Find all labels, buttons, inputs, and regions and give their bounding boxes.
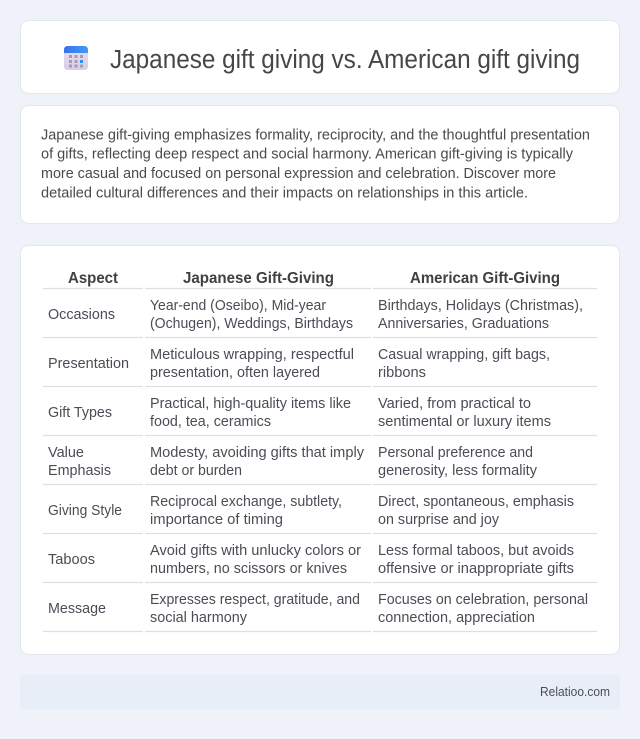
row: taboos: Avoid gifts with unlucky colors or <box>150 542 361 559</box>
row: value emphasis: Value <box>48 444 84 461</box>
row: occasions: Year-end (Oseibo), Mid-year <box>150 297 326 314</box>
row: gift types: Practical, high-quality items like <box>150 395 351 412</box>
row: taboos <box>48 542 574 577</box>
row: value emphasis <box>48 444 537 479</box>
row: taboos: Less formal taboos, but avoids <box>378 542 574 559</box>
row: value emphasis: Personal preference and <box>378 444 533 461</box>
table header row: Japanese Gift-Giving <box>183 270 334 287</box>
row: message: Focuses on celebration, personal <box>378 591 588 608</box>
table header row: Aspect <box>68 270 118 287</box>
row: giving style: Reciprocal exchange, subtlety, <box>150 493 342 510</box>
row: presentation: Casual wrapping, gift bags, <box>378 346 550 363</box>
row: presentation: Presentation <box>48 355 129 372</box>
row: value emphasis: debt or burden <box>150 462 242 479</box>
row: giving style: Giving Style <box>48 502 122 519</box>
row: giving style <box>48 493 574 528</box>
intro text: of gifts, reflecting deep respect and social harmony. American gift-giving is typically <box>41 146 573 163</box>
row: message: social harmony <box>150 609 247 626</box>
panel: introduction <box>20 106 620 224</box>
row: gift types: food, tea, ceramics <box>150 413 271 430</box>
intro text: detailed cultural differences and their impacts on relationships in this article. <box>41 184 528 201</box>
row: gift types: sentimental or luxury items <box>378 413 551 430</box>
intro text: more casual and focused on personal expression and celebration. Discover more <box>41 165 556 182</box>
row: value emphasis: generosity, less formality <box>378 462 537 479</box>
row: taboos: offensive or inappropriate gifts <box>378 560 574 577</box>
row: message: Expresses respect, gratitude, and <box>150 591 360 608</box>
row: message: Message <box>48 600 106 617</box>
row: giving style: Direct, spontaneous, emphasis <box>378 493 574 510</box>
row: occasions: (Ochugen), Weddings, Birthdays <box>150 315 353 332</box>
row: occasions: Occasions <box>48 306 115 323</box>
row: presentation: ribbons <box>378 364 426 381</box>
icon: calendar <box>64 46 88 70</box>
row: gift types: Varied, from practical to <box>378 395 531 412</box>
title: Japanese gift giving vs. American gift giving <box>110 46 580 74</box>
row: occasions: Anniversaries, Graduations <box>378 315 549 332</box>
panel: comparison table <box>20 246 620 654</box>
row: presentation <box>48 346 550 381</box>
row: taboos: Taboos <box>48 551 95 568</box>
row: message: connection, appreciation <box>378 609 535 626</box>
row: giving style: importance of timing <box>150 511 283 528</box>
row: giving style: on surprise and joy <box>378 511 499 528</box>
row: occasions <box>48 297 583 332</box>
row: presentation: Meticulous wrapping, respectful <box>150 346 354 363</box>
row: gift types: Gift Types <box>48 404 112 421</box>
row: value emphasis: Modesty, avoiding gifts that imply <box>150 444 364 461</box>
intro text: Japanese gift-giving emphasizes formality, reciprocity, and the thoughtful presentation <box>41 126 590 143</box>
table header row: American Gift-Giving <box>410 270 560 287</box>
footer bar <box>20 675 620 709</box>
row: presentation: presentation, often layered <box>150 364 320 381</box>
row: message <box>48 591 588 626</box>
footer credit: Relatioo.com <box>540 685 610 699</box>
row: value emphasis: Emphasis <box>48 462 111 479</box>
intro text <box>41 126 590 201</box>
row: gift types <box>48 395 551 430</box>
row: occasions: Birthdays, Holidays (Christmas), <box>378 297 583 314</box>
panel: title header <box>20 20 620 94</box>
row: taboos: numbers, no scissors or knives <box>150 560 347 577</box>
table header row <box>68 270 560 287</box>
